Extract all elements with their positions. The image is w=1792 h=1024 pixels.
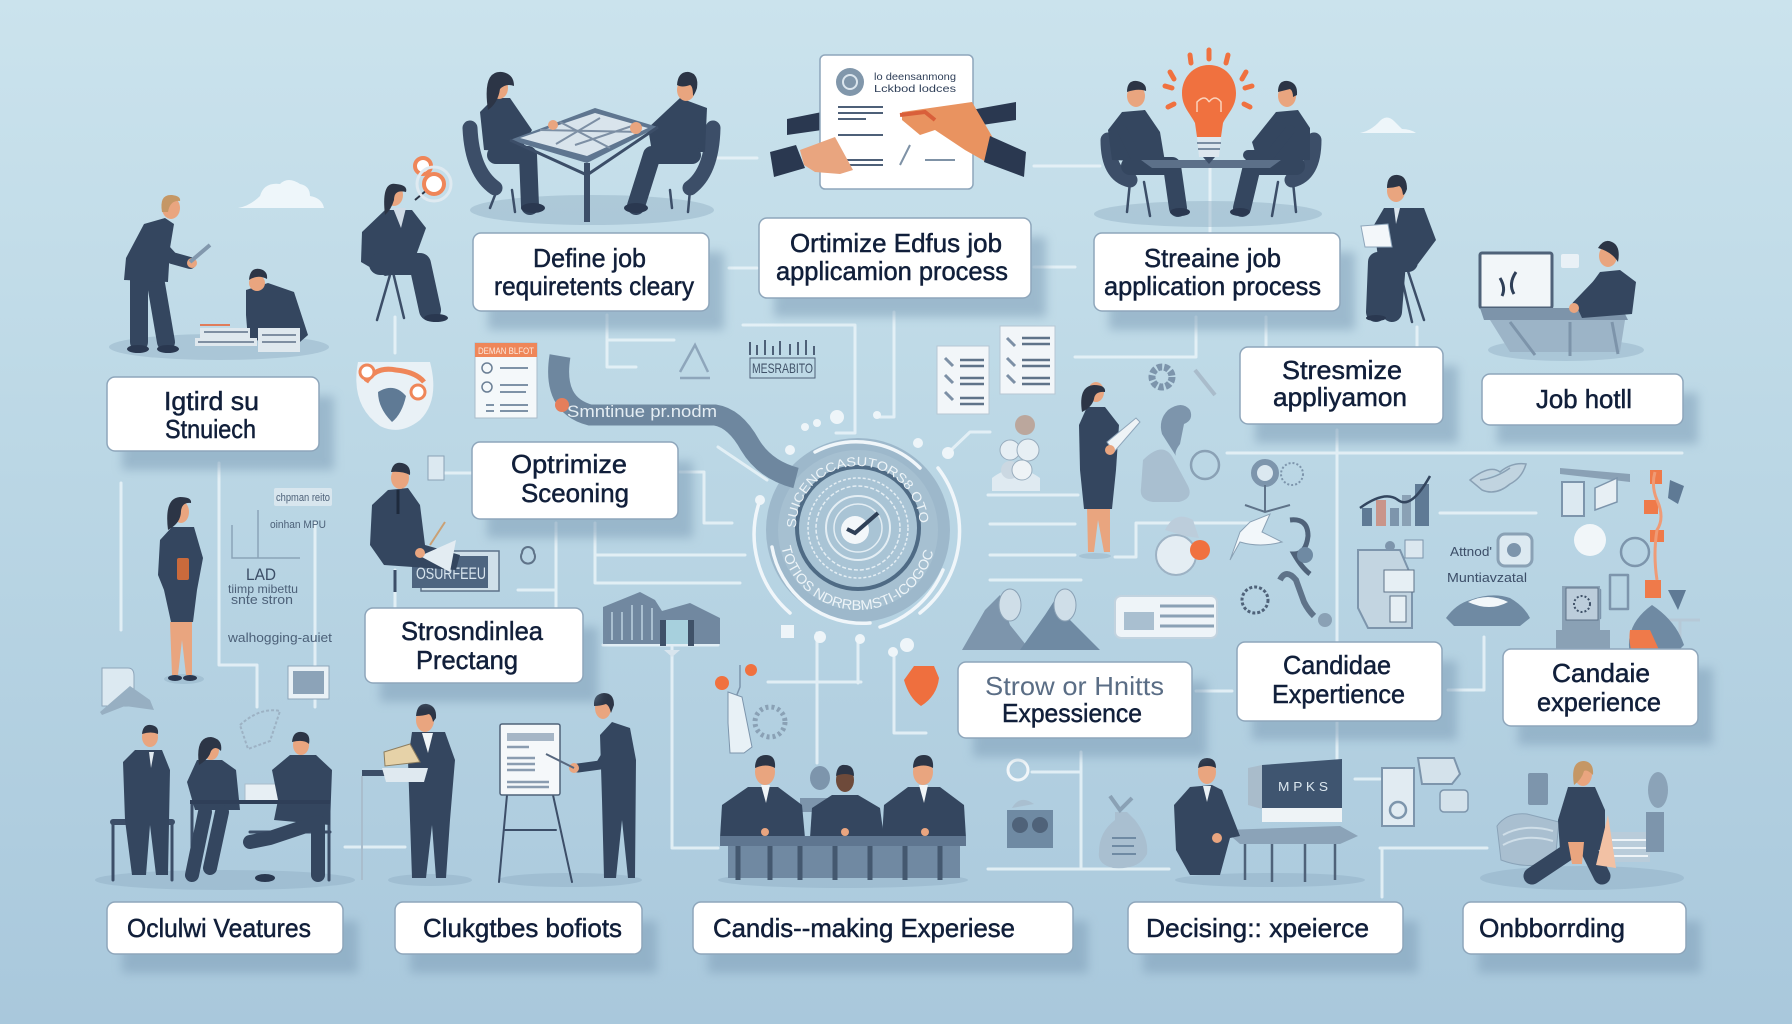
box: strow or hnitts experience: Expessience (1002, 698, 1142, 728)
figure: presenter with flipchart (498, 693, 642, 887)
box: igtird su: Igtird su (164, 386, 259, 416)
box: optimize job application: Ortimize Edfus job (790, 228, 1002, 258)
icon: paper stacks (937, 326, 1055, 414)
figure: three seated men (718, 755, 968, 888)
box: candidate experience right: Candaie (1552, 658, 1650, 688)
box: candidate experience right (1503, 649, 1713, 745)
box: stresmize: appliyamon (1273, 382, 1407, 412)
box: candidate experience centre: Candidae (1283, 650, 1391, 680)
figure: two people with lightbulb idea (1094, 50, 1322, 227)
icon: tablet (288, 666, 329, 699)
box: define job requirements: Define job (533, 243, 646, 273)
figure: man with tray (362, 704, 472, 886)
icon: pale doodle bottom-left (240, 710, 280, 749)
caption: attnod muntiavzatal: Attnod' (1450, 545, 1492, 559)
figure: man leaning with laptop and man with books (109, 195, 329, 360)
annotation text: left chart (227, 488, 332, 645)
ribbon banner (555, 356, 796, 478)
icon: document held by hands: lo deensanmong (874, 71, 956, 83)
icon: orange shield (904, 666, 939, 706)
box: onboarding (1463, 902, 1701, 973)
icon: device machine (1358, 540, 1423, 628)
icon: résumé document: DEMAN BLFOT (478, 346, 534, 356)
figure: standing woman with phone (158, 497, 204, 684)
icon: two busts (962, 589, 1100, 650)
figure: man sitting with sign: OSURFEEU (416, 564, 486, 583)
small icon: padlock (521, 547, 535, 564)
icon: doodle (1470, 464, 1526, 492)
centre circle emblem with checkmark: SUICENCCASUTORS8 OTO (787, 456, 928, 528)
box: strow or hnitts experience: Strow or Hnitts (985, 671, 1164, 701)
box: define job requirements (473, 233, 724, 330)
box: candidate experience right: experience (1537, 687, 1661, 717)
icon: building (603, 592, 720, 657)
figure: seated man with paper (1361, 175, 1436, 322)
figure: woman with clipboard (1079, 382, 1140, 559)
icon: bubble cluster (992, 415, 1040, 491)
annotation text: left chart: tiimp mibettu (228, 582, 298, 596)
box: stresmize: Stresmize (1282, 355, 1402, 385)
box: decision experience: Decising:: xpeierce (1146, 913, 1369, 943)
figure: man at desktop computer (1174, 758, 1365, 887)
box: streamline job application: application process (1104, 271, 1321, 301)
icon: pale head blob with orange (1156, 517, 1210, 575)
figure: two people at table reviewing papers (470, 72, 714, 225)
icon: document held by hands: Lckbod lodces (874, 83, 956, 95)
box: optimize screening: Sceoning (521, 478, 629, 508)
icon: mesrabito city tag (750, 340, 815, 378)
icon: info card (1115, 596, 1217, 638)
icon: small triangle device (680, 345, 710, 378)
annotation text: left chart: oinhan MPU (270, 519, 326, 531)
box: streamline job application (1094, 233, 1355, 330)
icon: gear and tools cluster (1141, 367, 1219, 502)
icon: ring (1008, 760, 1028, 780)
centre circle emblem with checkmark (752, 410, 962, 657)
icon: mesrabito city tag: MESRABITO (752, 360, 813, 376)
caption: attnod muntiavzatal: Muntiavzatal (1447, 571, 1527, 585)
box: stresmize (1240, 347, 1458, 443)
box: job hotll (1482, 374, 1698, 444)
figure: three people at meeting table (95, 725, 355, 890)
box: candidate experience centre: Expertience (1272, 679, 1405, 709)
figure: onboarding person on platform (1480, 761, 1684, 890)
icon: helmet orange (1629, 605, 1684, 657)
box: candidate making experience: Candis--making Experiese (713, 913, 1015, 943)
box: optimize screening (472, 442, 693, 538)
box: decision experience (1128, 902, 1418, 973)
figure: man at desktop computer: M P K S (1278, 779, 1328, 794)
figure: seated woman with flower (361, 158, 451, 322)
ribbon banner: Smntinue pr.nodm (567, 402, 717, 421)
box: strow or hnitts experience (958, 662, 1207, 757)
centre circle emblem with checkmark: TOTIOS NDRRBMSTI-ICOGOC (782, 544, 933, 610)
annotation text: left chart: snte stron (231, 592, 293, 607)
icon: document held by hands (770, 55, 1026, 189)
icon: small flask by optimize (428, 456, 444, 480)
box: strosndinlea (365, 608, 598, 702)
figure: man sitting with sign (370, 463, 499, 592)
caption: attnod muntiavzatal (1447, 534, 1532, 585)
box: candidate making experience (693, 902, 1088, 973)
box: optimize job application: applicamion process (776, 256, 1008, 286)
icon: server box (1556, 586, 1610, 652)
icon: résumé document (475, 343, 537, 418)
box: streamline job application: Streaine job (1144, 243, 1281, 273)
annotation text: left chart: chpman reito (276, 492, 330, 504)
box: job hotll: Job hotll (1536, 384, 1632, 414)
box: strosndinlea: Strosndinlea (401, 616, 544, 646)
box: benefits (395, 902, 657, 973)
connector lines (121, 158, 1682, 897)
icon: stage lamp (1446, 595, 1530, 626)
icon: balloon pin network (1245, 462, 1303, 512)
icon: sack (1099, 796, 1147, 868)
box: features: Oclulwi Veatures (127, 913, 311, 943)
annotation text: left chart: LAD (246, 565, 276, 584)
box: candidate experience centre (1237, 642, 1457, 740)
icon: faces box (1007, 800, 1053, 848)
box: igtird su: Stnuiech (165, 414, 256, 444)
icon: flask left (100, 668, 154, 715)
box: optimize screening: Optrimize (511, 449, 627, 479)
icon: keychain tool cluster (1230, 514, 1332, 627)
box: strosndinlea: Prectang (416, 645, 518, 675)
icon: right dashboard cluster (1560, 468, 1700, 650)
box: benefits: Clukgtbes bofiots (423, 913, 622, 943)
icon: plant with coat (715, 664, 785, 753)
bar chart icon (1360, 476, 1430, 526)
annotation text: left chart: walhogging-auiet (227, 630, 332, 645)
box: features (107, 902, 358, 973)
box: igtird su (107, 377, 334, 470)
icon: device cluster bottom (1382, 758, 1468, 826)
box: onboarding: Onbborrding (1479, 913, 1625, 943)
figure: man at computer (1480, 241, 1644, 361)
cloud right (1360, 117, 1416, 133)
box: define job requirements: requiretents cleary (494, 271, 694, 301)
box: optimize job application (759, 218, 1046, 317)
icon: shield with rings (356, 362, 433, 430)
cloud left (238, 180, 324, 208)
